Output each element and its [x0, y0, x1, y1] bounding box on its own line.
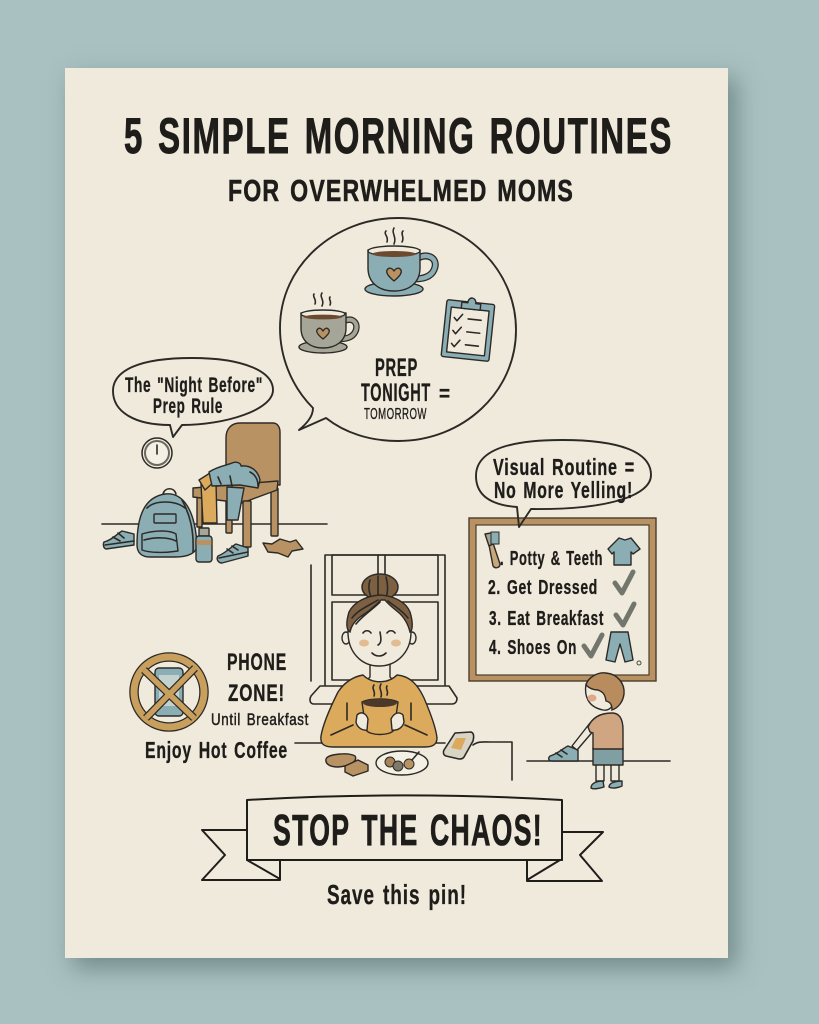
text: prep tonight = tomorrow: TONIGHT [361, 379, 431, 407]
icon: grey coffee cup [299, 293, 356, 353]
water bottle [196, 528, 212, 562]
text: visual routine no more yelling: No More Yelling! [494, 477, 633, 503]
panel: boy putting on shoes [527, 673, 670, 789]
toast pieces [326, 754, 368, 776]
banner: stop the chaos [202, 796, 603, 881]
shoe left [103, 531, 134, 549]
panel: visual routine board [469, 440, 656, 681]
chair with clothes [193, 423, 280, 547]
icon: pants [606, 632, 633, 662]
routine checklist text: 2. Get Dressed [488, 577, 598, 599]
icon: blue coffee cup [365, 228, 435, 296]
text: night before prep rule: Prep Rule [153, 395, 223, 418]
mom hair bun [362, 574, 398, 600]
icon: t-shirt [608, 538, 640, 565]
text: night before prep rule [125, 374, 263, 418]
text: prep tonight = tomorrow: TOMORROW [364, 406, 427, 423]
panel: night before prep scene [102, 358, 327, 563]
text: save this pin: Save this pin! [327, 879, 467, 910]
tablet on table [443, 732, 474, 759]
text: visual routine no more yelling: Visual Routine = [493, 454, 635, 480]
text: phone zone: PHONE [227, 649, 287, 676]
text: prep tonight = tomorrow: = [439, 381, 451, 406]
icon: small flower [637, 661, 641, 665]
boy legs and feet [591, 764, 622, 789]
routine checklist text: 3. Eat Breakfast [489, 608, 604, 630]
table line and cable [295, 742, 512, 780]
panel: mom at window [295, 555, 512, 780]
boy shorts [593, 748, 623, 765]
paper card [65, 68, 728, 958]
mom neck [365, 662, 395, 682]
text: phone zone: ZONE! [228, 680, 285, 707]
boy arm [572, 723, 595, 750]
banner text: STOP THE CHAOS! [273, 806, 543, 855]
mug with steam and hands [331, 684, 427, 735]
text: night before prep rule: The "Night Before" [125, 374, 263, 397]
crumpled cloth [263, 539, 303, 557]
icon: clipboard checklist [441, 295, 495, 361]
routine checklist text: 4. Shoes On [489, 637, 577, 659]
icon: crossed out phone [134, 657, 204, 727]
routine checklist text [488, 548, 604, 659]
icon: toothbrush [485, 532, 500, 568]
routine checklist text: . Potty & Teeth [500, 548, 603, 570]
breakfast plate [376, 751, 428, 775]
text: phone zone [227, 649, 287, 707]
panel: prep tonight thought bubble [280, 218, 516, 441]
window frame [310, 555, 457, 704]
backpack [137, 489, 197, 557]
text: prep tonight = tomorrow: PREP [375, 354, 418, 382]
panel: phone zone [134, 649, 309, 763]
wooden board frame [469, 518, 656, 681]
large speech bubble outline [280, 218, 516, 441]
text: visual routine no more yelling [493, 454, 635, 503]
shoe right [217, 544, 248, 563]
floor line [102, 523, 327, 525]
speech bubble: night before [113, 358, 273, 437]
text: prep tonight = tomorrow [361, 354, 451, 423]
icons: check marks [584, 572, 634, 656]
mom head [342, 595, 416, 666]
boy head [586, 673, 624, 710]
text: until breakfast: Until Breakfast [211, 710, 309, 729]
shoe in hand [549, 746, 578, 761]
boy shirt [588, 713, 623, 749]
floor line [527, 760, 670, 762]
mom sweater [321, 675, 437, 747]
icon: wall clock [142, 438, 172, 468]
ribbon shape [202, 796, 603, 881]
speech bubble: visual routine [476, 440, 651, 527]
text: enjoy hot coffee: Enjoy Hot Coffee [145, 737, 288, 763]
subtitle: FOR OVERWHELMED MOMS [228, 173, 574, 208]
